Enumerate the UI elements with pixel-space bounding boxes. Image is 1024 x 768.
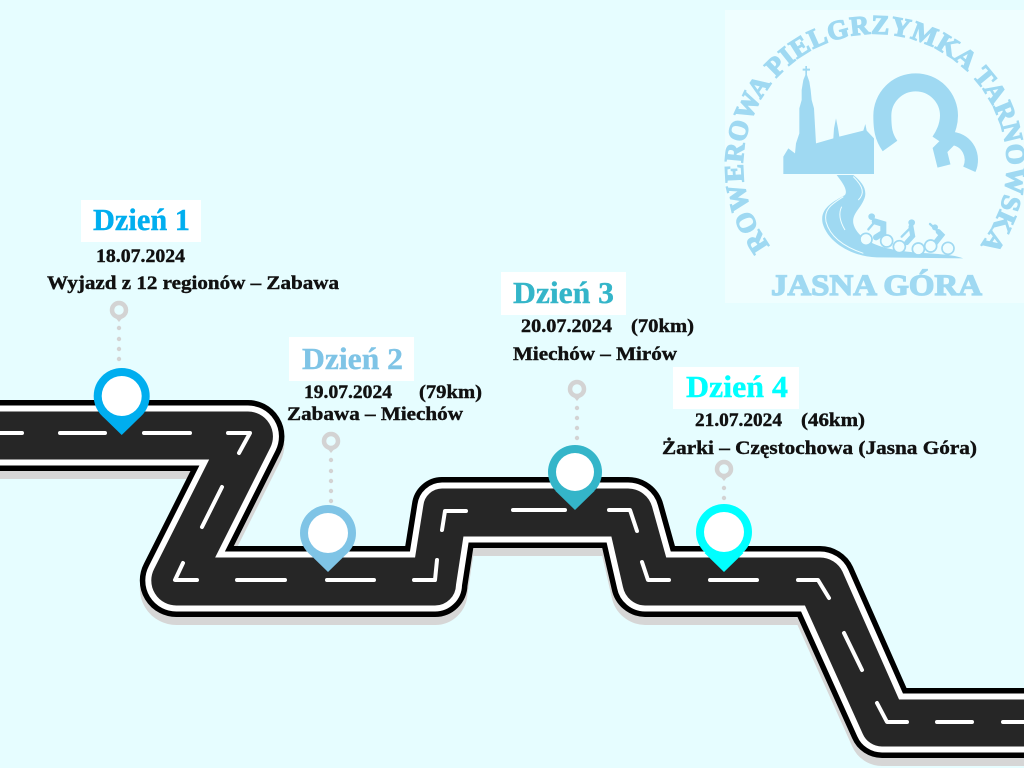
day 3 date: 20.07.2024 xyxy=(521,317,612,337)
day 1 heading: Dzień 1 xyxy=(93,202,190,237)
milestone 4 marker xyxy=(696,462,752,572)
road centre dashes xyxy=(0,433,1024,722)
label: day 4 xyxy=(662,367,977,459)
day 2 route: Zabawa – Miechów xyxy=(287,405,464,425)
small grey pin 3 xyxy=(570,382,584,440)
logo ring text: ROWEROWA PIELGRZYMKA TARNOWSKA xyxy=(724,15,1024,256)
label: day 2 xyxy=(287,337,482,425)
day 4 distance: (46km) xyxy=(801,411,865,431)
winding road xyxy=(0,408,1024,758)
label: day 1 xyxy=(47,200,339,294)
logo: Rowerowa Pielgrzymka Tarnowska xyxy=(724,10,1024,303)
road shadow xyxy=(0,416,1024,758)
day 3 heading: Dzień 3 xyxy=(513,275,614,310)
small grey pin 2 xyxy=(324,434,338,503)
day 4 heading xyxy=(673,367,799,409)
day 2 heading: Dzień 2 xyxy=(302,341,403,376)
day 3 distance: (70km) xyxy=(631,317,694,337)
label: day 3 xyxy=(501,272,694,365)
day 2 distance: (79km) xyxy=(419,383,482,403)
teal pin 3 xyxy=(548,445,602,510)
small grey pin 1 xyxy=(112,303,126,361)
cyan pin 4 xyxy=(696,504,752,572)
day 4 heading: Dzień 4 xyxy=(686,369,788,404)
day 2 date: 19.07.2024 xyxy=(304,383,392,403)
logo caption: JASNA GÓRA xyxy=(771,269,982,302)
milestone 1 marker xyxy=(94,303,150,435)
milestone 2 marker xyxy=(300,434,356,572)
day 1 route: Wyjazd z 12 regionów – Zabawa xyxy=(47,274,339,294)
milestone 3 marker xyxy=(548,382,602,510)
light blue pin 2 xyxy=(300,505,356,572)
small grey pin 4 xyxy=(717,462,731,500)
day 3 heading xyxy=(501,272,626,315)
day 1 date: 18.07.2024 xyxy=(96,247,185,267)
day 4 route: Żarki – Częstochowa (Jasna Góra) xyxy=(662,438,977,459)
road surface with white border xyxy=(0,408,1024,750)
day 1 heading xyxy=(81,200,201,242)
logo emblem xyxy=(783,66,971,258)
day 2 heading xyxy=(289,337,414,381)
day 3 route: Miechów – Mirów xyxy=(513,345,678,365)
road black edge xyxy=(0,408,1024,750)
blue pin 1 xyxy=(94,368,150,435)
day 4 date: 21.07.2024 xyxy=(695,411,782,431)
